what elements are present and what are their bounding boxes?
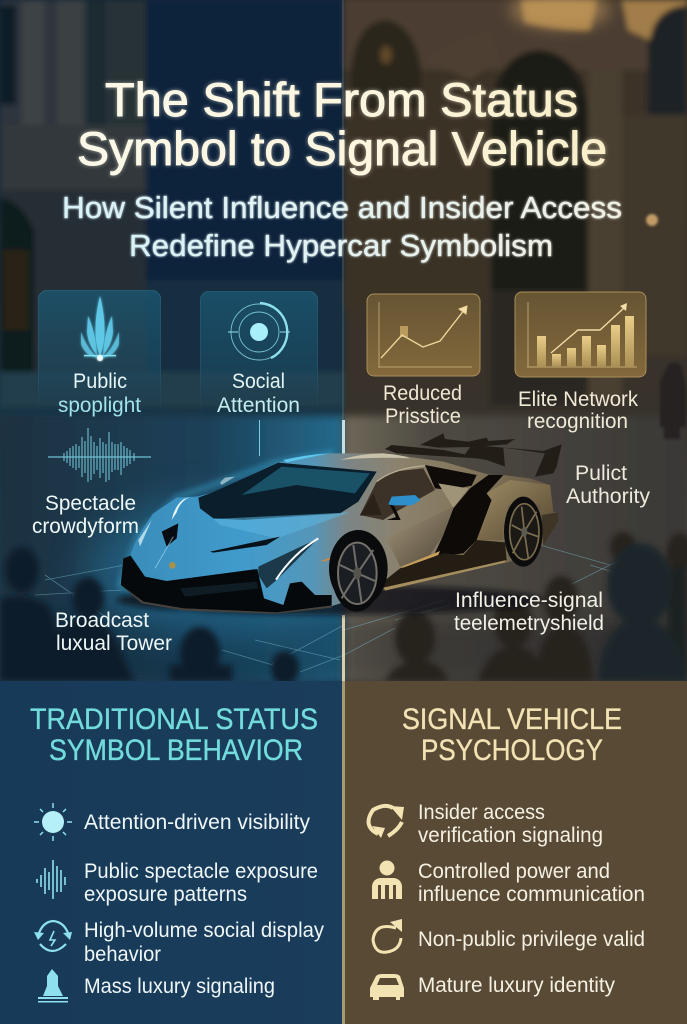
item: high-volume social display: High-volume social display (84, 919, 324, 942)
car shadow (117, 585, 543, 615)
label: elite network recognition: Elite Network (518, 388, 638, 411)
background figure (660, 362, 686, 439)
label: broadcast luxual tower (55, 609, 172, 655)
item: insider access (369, 801, 603, 847)
hood highlight (172, 497, 190, 520)
label: public spoplight (58, 370, 141, 417)
heading: SYMBOL BEHAVIOR (49, 734, 303, 767)
headlight (258, 538, 318, 588)
windshield (198, 463, 377, 520)
label: pulict authority (566, 462, 651, 508)
icon: spotlight flame (81, 296, 119, 361)
building left (0, 0, 344, 407)
subtitle: How Silent Influence and Insider Access (62, 190, 622, 225)
lamp (646, 214, 658, 226)
item: mature luxury identity: Mature luxury identity (418, 974, 615, 997)
label: social attention: Attention (217, 394, 300, 417)
rear fender (477, 480, 553, 540)
divider glow (342, 0, 344, 420)
label: pulict authority: Pulict (575, 462, 627, 485)
item: public spectacle exposure (37, 860, 318, 906)
crease (155, 537, 173, 568)
icon: waveform (48, 428, 151, 482)
panel: traditional status symbol behavior (0, 681, 344, 1024)
item: non-public privilege (373, 919, 645, 952)
icon: tower (38, 969, 68, 1002)
label: spectacle crowdyform: crowdyform (32, 515, 139, 538)
panel: public spotlight (38, 290, 161, 417)
panel: elite network chart (515, 292, 646, 433)
side window (360, 468, 435, 520)
side marker (322, 557, 333, 562)
ground (0, 416, 344, 681)
chart: line chart (379, 302, 472, 368)
mirror: side (387, 495, 421, 520)
rear wing (385, 433, 562, 477)
wheel: front (332, 535, 382, 612)
icon: car (370, 974, 404, 1000)
label: influence-signal telemetry (454, 589, 604, 635)
sill (383, 540, 507, 590)
label: spectacle crowdyform: Spectacle (45, 492, 136, 515)
label: reduced prisstice: Reduced (383, 382, 462, 405)
item: mass luxury signaling (38, 969, 275, 1002)
waveform: spectacle crowdyform (32, 428, 151, 538)
label: spectacle crowdyform (32, 492, 139, 538)
label: broadcast luxual tower: luxual Tower (56, 632, 172, 655)
building right (344, 0, 687, 405)
heading (402, 703, 622, 767)
label: elite network recognition: recognition (527, 410, 628, 433)
item: public spectacle exposure: exposure patterns (84, 883, 247, 906)
icon: target rings (228, 303, 290, 360)
label: pulict authority: Authority (566, 485, 651, 508)
panel: reduced prestige chart (367, 294, 480, 428)
front wheel arch (329, 530, 388, 607)
heading: PSYCHOLOGY (421, 734, 603, 767)
icon: person (372, 860, 402, 899)
label: public spoplight: Public (73, 370, 127, 393)
badge (169, 562, 176, 569)
label: public spoplight: spoplight (58, 394, 141, 417)
item: non-public privilege: Non-public privilege valid (418, 928, 645, 951)
icon: refresh arrows (369, 806, 404, 838)
item: controlled power: influence communication (418, 883, 645, 906)
hood slit (210, 537, 280, 553)
background scene (0, 0, 687, 681)
item: high-volume social display: behavior (84, 943, 161, 966)
label: social attention: Social (232, 370, 285, 393)
subtitle (62, 190, 622, 263)
mirror: hood (220, 477, 235, 485)
front fascia (121, 556, 332, 612)
perspective grid (35, 545, 640, 672)
label: elite network recognition (518, 388, 638, 433)
heading: SIGNAL VEHICLE (402, 703, 622, 736)
item: high-volume social display (34, 919, 324, 966)
panel: social attention (200, 291, 318, 456)
item: controlled power (372, 860, 645, 906)
label: influence-signal telemetry: teelemetryshield (454, 612, 604, 635)
item: controlled power: Controlled power and (418, 860, 610, 883)
subtitle: Redefine Hypercar Symbolism (129, 228, 553, 263)
panel: signal vehicle psychology (342, 681, 687, 1024)
heading: TRADITIONAL STATUS (30, 703, 318, 736)
label: broadcast luxual tower: Broadcast (55, 609, 149, 632)
icon: waveform (37, 860, 65, 899)
rear bumper (542, 512, 558, 545)
title (77, 73, 607, 175)
label: social attention (217, 370, 300, 417)
roof highlights (283, 453, 330, 462)
icon: sun (34, 803, 72, 841)
car glow (120, 453, 330, 608)
connector line (259, 420, 260, 456)
chart: bars and trend (527, 302, 637, 367)
label: reduced prisstice: Prisstice (385, 405, 461, 428)
door (387, 507, 453, 567)
hypercar (117, 433, 562, 615)
icon: cycle arrows (34, 921, 72, 951)
label: reduced prisstice (383, 382, 462, 428)
wheel: rear (504, 497, 543, 567)
fender line (213, 512, 350, 538)
hood vent (162, 523, 178, 547)
heading (30, 703, 318, 767)
ground glow (85, 500, 345, 640)
item: insider access: verification signaling (418, 824, 603, 847)
item: attention-driven visibility: Attention-driven visibility (84, 811, 310, 834)
title: Symbol to Signal Vehicle (77, 122, 607, 175)
rear quarter (425, 465, 477, 490)
icon: circular arrow (373, 919, 402, 952)
side intake (433, 475, 503, 557)
item: attention-driven visibility (34, 803, 310, 841)
title: The Shift From Status (105, 73, 578, 126)
item: insider access: Insider access (418, 801, 545, 824)
item: public spectacle exposure: Public spectacle exposure (84, 860, 318, 883)
crowd silhouettes (0, 532, 687, 685)
item: mass luxury signaling: Mass luxury signaling (84, 975, 275, 998)
car body (120, 453, 558, 612)
label: influence-signal telemetry: Influence-signal (455, 589, 603, 612)
